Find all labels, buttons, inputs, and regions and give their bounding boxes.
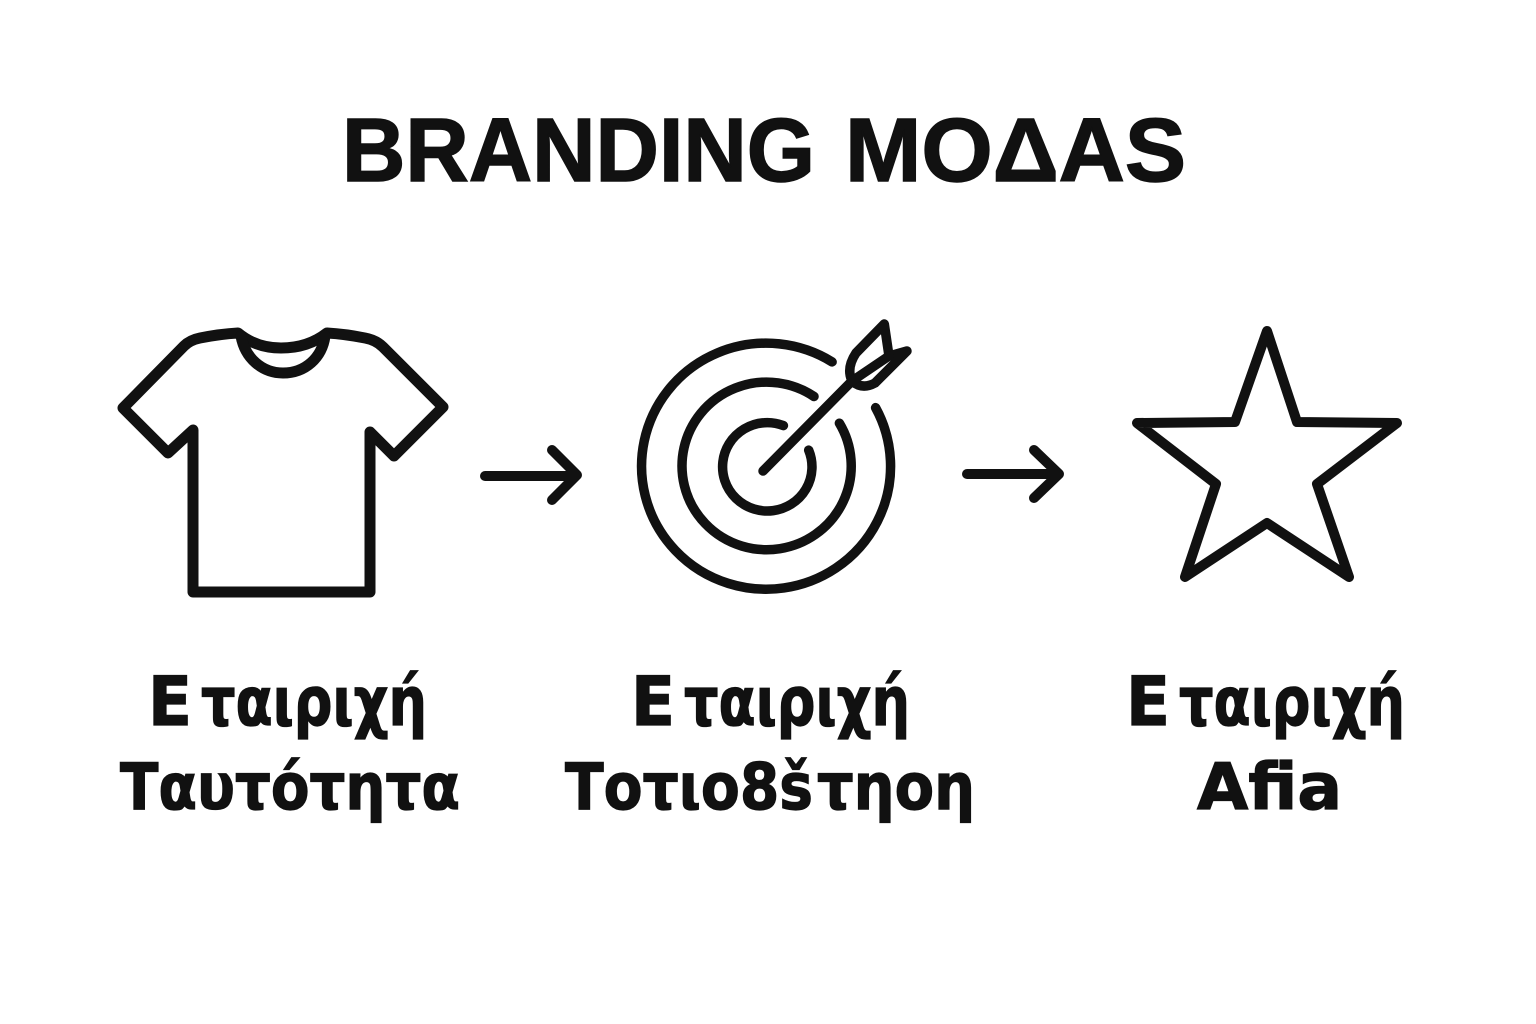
arrow: shirt to target [485,450,577,500]
label: corporate value: Ε [1126,663,1170,742]
icon: target with arrow [642,324,907,589]
label: corporate positioning: Τοτιο8š [565,751,813,825]
label: corporate value [1126,663,1405,825]
icon: t-shirt [123,333,443,592]
title [342,101,1186,201]
title: MOΔAS [845,101,1186,201]
label: corporate identity: Ε [148,663,192,742]
label: corporate positioning: τηοη [817,751,975,825]
label: corporate positioning [565,663,975,825]
label: corporate value: ταιριχή [1179,663,1405,742]
label: corporate identity: Ταυτότητα [120,751,460,825]
label: corporate value: Αfia [1197,751,1342,825]
title: BRANDING [342,101,815,201]
label: corporate positioning: ταιριχή [684,663,910,742]
label: corporate identity: ταιριχή [201,663,427,742]
arrow: target to star [967,450,1059,498]
label: corporate positioning: Ε [631,663,675,742]
icon: star [1137,331,1397,577]
label: corporate identity [120,663,460,825]
